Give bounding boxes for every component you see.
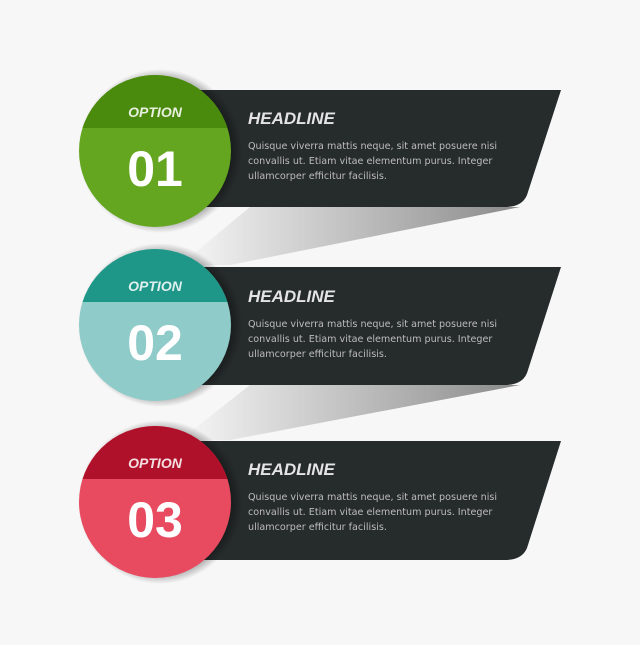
shadow 1 <box>180 207 520 265</box>
panel: item 3: OPTION <box>128 455 183 471</box>
body 3: ullamcorper efficitur facilisis. <box>248 522 387 533</box>
circle 1 <box>79 75 231 227</box>
headline 2: HEADLINE <box>248 287 336 306</box>
panel: item 1 <box>78 69 561 233</box>
body 1: ullamcorper efficitur facilisis. <box>248 171 387 182</box>
body 3: convallis ut. Etiam vitae elementum purus. Integer <box>248 507 492 518</box>
body 3: Quisque viverra mattis neque, sit amet posuere nisi <box>248 492 497 503</box>
body 1: Quisque viverra mattis neque, sit amet posuere nisi <box>248 141 497 152</box>
panel: item 2 <box>78 243 561 407</box>
body 2: convallis ut. Etiam vitae elementum purus. Integer <box>248 334 492 345</box>
panel: item 2: OPTION <box>128 278 183 294</box>
body 2: Quisque viverra mattis neque, sit amet posuere nisi <box>248 319 497 330</box>
body 2: ullamcorper efficitur facilisis. <box>248 349 387 360</box>
panel: item 3 <box>78 420 561 584</box>
panel: item 2: 02 <box>127 315 183 371</box>
body 1: convallis ut. Etiam vitae elementum purus. Integer <box>248 156 492 167</box>
circle 3 <box>79 426 231 578</box>
panel: item 3: 03 <box>127 492 183 548</box>
panel: item 1: OPTION <box>128 104 183 120</box>
headline 1: HEADLINE <box>248 109 336 128</box>
circle 2 <box>79 249 231 401</box>
panel: item 1: 01 <box>127 141 183 197</box>
headline 3: HEADLINE <box>248 460 336 479</box>
shadow 2 <box>180 385 520 440</box>
